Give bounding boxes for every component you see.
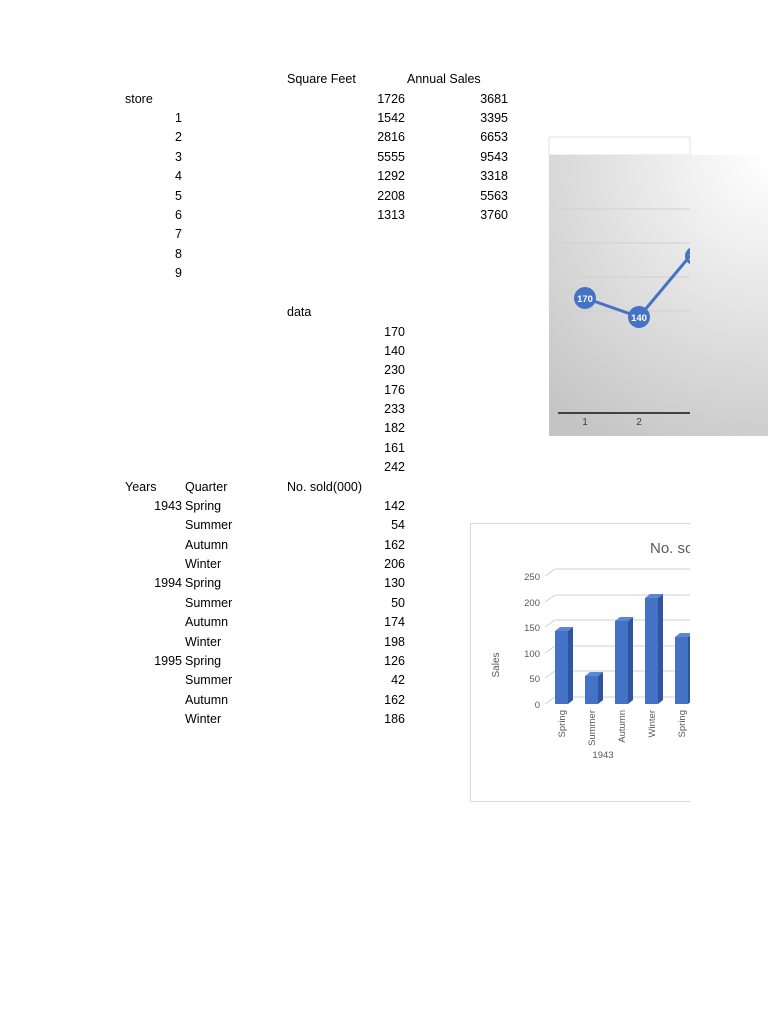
bar chart: 150 [524, 623, 540, 634]
table: store data: 1726 [377, 92, 405, 106]
table: quarterly sales: Spring [185, 576, 221, 590]
table: quarterly sales: Spring [185, 499, 221, 513]
table: store data: 2816 [377, 130, 405, 144]
table: quarterly sales: No. sold(000) [287, 480, 362, 494]
table: quarterly sales: 206 [384, 557, 405, 571]
line chart: 170 [577, 294, 593, 305]
bar chart: 50 [529, 674, 540, 685]
table: store data: Square Feet [287, 72, 356, 86]
table: quarterly sales: 42 [391, 673, 405, 687]
line chart [548, 136, 768, 436]
table: quarterly sales: Autumn [185, 538, 228, 552]
table: quarterly sales: 162 [384, 693, 405, 707]
bar chart: 250 [524, 572, 540, 583]
bar chart: Spring [557, 710, 568, 737]
table: quarterly sales: 186 [384, 712, 405, 726]
table: data column: 140 [384, 344, 405, 358]
table: quarterly sales [125, 480, 405, 726]
table: quarterly sales: 126 [384, 654, 405, 668]
bar chart: Spring [677, 710, 688, 737]
table: quarterly sales: 50 [391, 596, 405, 610]
bar chart: Autumn [617, 710, 628, 743]
table: store data: 6653 [480, 130, 508, 144]
bar chart: Winter [647, 710, 658, 737]
line chart: 2 [636, 417, 642, 428]
table: quarterly sales: Spring [185, 654, 221, 668]
table: quarterly sales: Winter [185, 712, 221, 726]
table: store data: 3318 [480, 169, 508, 183]
table: quarterly sales: 1994 [154, 576, 182, 590]
table: data column: 161 [384, 441, 405, 455]
bar chart: No. sold [650, 540, 705, 557]
table: store data: 6 [175, 208, 182, 222]
bar chart: 1943 [592, 750, 614, 761]
line chart: 1 [582, 417, 588, 428]
table: quarterly sales: Years [125, 480, 157, 494]
table: store data: 3760 [480, 208, 508, 222]
table: data column: data [287, 305, 311, 319]
table: data column: 242 [384, 460, 405, 474]
table: store data: 1292 [377, 169, 405, 183]
table: data column: 233 [384, 402, 405, 416]
table: store data: 2208 [377, 189, 405, 203]
table: quarterly sales: Autumn [185, 693, 228, 707]
table: quarterly sales: 1943 [154, 499, 182, 513]
table: store data: Annual Sales [407, 72, 481, 86]
table: quarterly sales: 142 [384, 499, 405, 513]
table: store data: 3681 [480, 92, 508, 106]
table: quarterly sales: Autumn [185, 615, 228, 629]
line chart: 2 [689, 252, 694, 263]
bar chart: 0 [535, 700, 540, 711]
bar chart: Sales [491, 652, 502, 678]
table: quarterly sales: 162 [384, 538, 405, 552]
table: store data: 2 [175, 130, 182, 144]
bar chart: Summer [587, 710, 598, 746]
table: store data: 3 [175, 150, 182, 164]
table: store data: 1542 [377, 111, 405, 125]
table: store data: 9543 [480, 150, 508, 164]
table: data column: 176 [384, 383, 405, 397]
table: store data: 4 [175, 169, 182, 183]
bar chart: 100 [524, 649, 540, 660]
table: quarterly sales: 130 [384, 576, 405, 590]
table: store data: 1 [175, 111, 182, 125]
table: store data: 1313 [377, 208, 405, 222]
table: quarterly sales: 1995 [154, 654, 182, 668]
table: data column: 230 [384, 363, 405, 377]
line chart: 140 [631, 313, 647, 324]
table: store data: 3395 [480, 111, 508, 125]
table: quarterly sales: 54 [391, 518, 405, 532]
table: quarterly sales: Winter [185, 635, 221, 649]
bar chart [470, 523, 690, 802]
table: quarterly sales: Summer [185, 518, 232, 532]
table: quarterly sales: Summer [185, 673, 232, 687]
table: store data: 5563 [480, 189, 508, 203]
table: quarterly sales: 198 [384, 635, 405, 649]
table: data column: 182 [384, 421, 405, 435]
table: quarterly sales: 174 [384, 615, 405, 629]
table: quarterly sales: Summer [185, 596, 232, 610]
bar chart: 200 [524, 598, 540, 609]
table: quarterly sales: Winter [185, 557, 221, 571]
table: store data: 5 [175, 189, 182, 203]
table: store data: 5555 [377, 150, 405, 164]
table: store data: 7 [175, 227, 182, 241]
table: store data [125, 72, 508, 280]
table: store data: 8 [175, 247, 182, 261]
table: data column [287, 305, 405, 474]
table: quarterly sales: Quarter [185, 480, 227, 494]
table: store data: 9 [175, 266, 182, 280]
table: data column: 170 [384, 325, 405, 339]
table: store data: store [125, 92, 153, 106]
